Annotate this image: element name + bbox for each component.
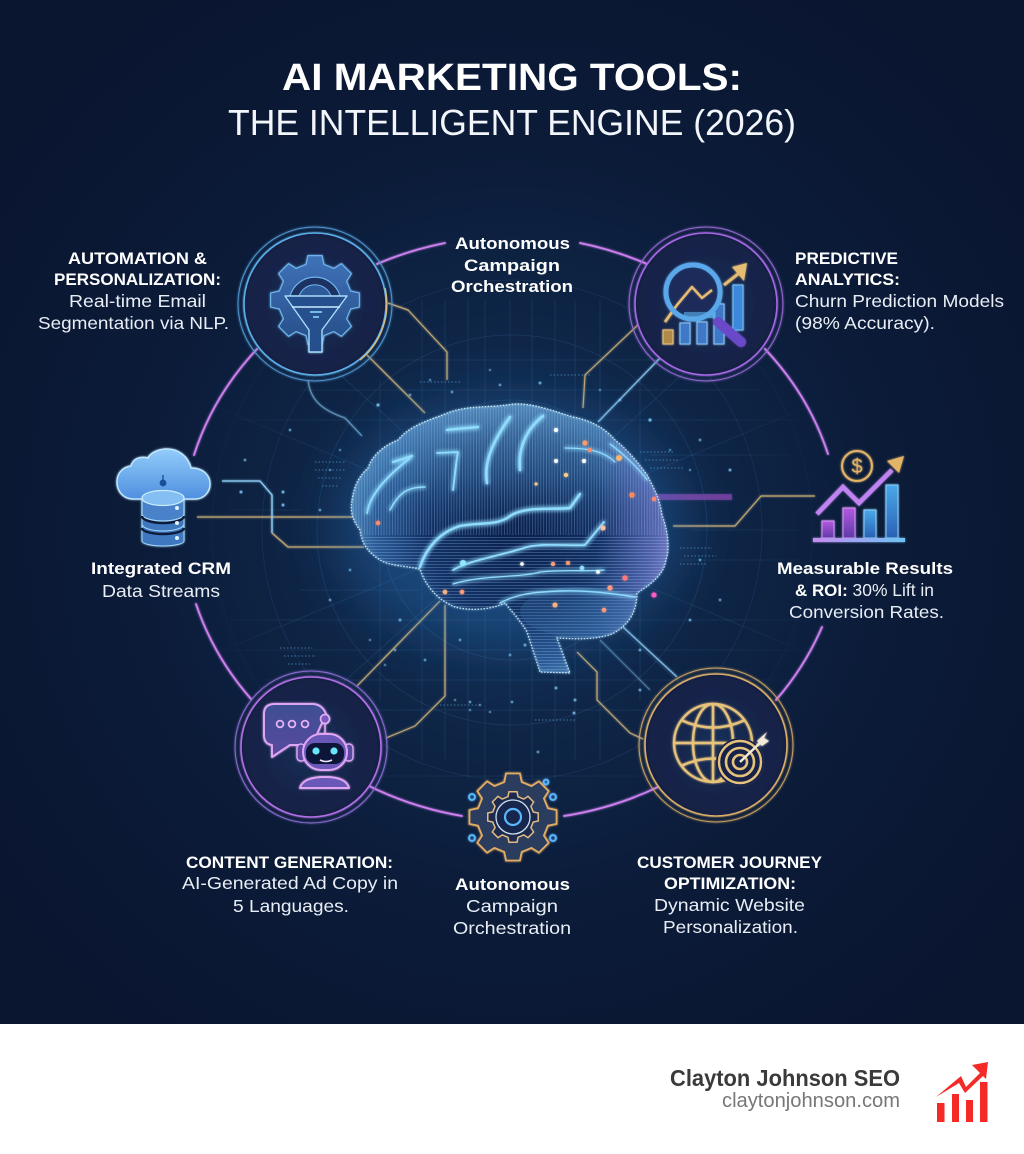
label text: Churn Prediction Models — [795, 291, 1004, 311]
node: content generation — [182, 671, 398, 916]
label text: Real-time Email — [69, 291, 206, 311]
label text: CONTENT GENERATION: — [186, 853, 393, 872]
data dots — [240, 369, 731, 753]
node: customer journey optimization — [637, 668, 823, 937]
icon: rising chart with coin — [813, 451, 905, 542]
label text: Integrated CRM — [91, 559, 231, 578]
label text: AUTOMATION & — [68, 249, 207, 268]
label text: PREDICTIVE — [795, 249, 898, 268]
icon: cloud database — [117, 449, 210, 546]
label text — [453, 875, 571, 938]
title — [228, 57, 796, 143]
label text — [777, 559, 953, 622]
node ring — [629, 227, 783, 381]
node: predictive analytics — [629, 227, 1004, 381]
title line 2: THE INTELLIGENT ENGINE (2026) — [228, 102, 796, 143]
label text: OPTIMIZATION: — [664, 874, 796, 893]
title line 1: AI MARKETING TOOLS: — [282, 57, 742, 99]
icon: gear — [469, 774, 556, 860]
label text — [182, 853, 398, 916]
node ring — [639, 668, 793, 822]
label: autonomous campaign orchestration top — [451, 234, 573, 296]
label text: Segmentation via NLP. — [38, 313, 229, 333]
brand url: claytonjohnson.com — [722, 1090, 900, 1112]
icon: red growth chart — [936, 1062, 988, 1122]
label text: PERSONALIZATION: — [54, 270, 221, 289]
brain textures — [345, 400, 675, 685]
gold traces — [197, 303, 815, 739]
brain folds — [367, 416, 647, 603]
brain halo — [335, 400, 685, 650]
node: autonomous campaign orchestration bottom — [453, 774, 571, 938]
blue traces — [222, 358, 677, 690]
label text: Orchestration — [453, 918, 571, 938]
brain edge — [351, 404, 668, 673]
label text: Data Streams — [102, 581, 220, 601]
label text: Conversion Rates. — [789, 602, 944, 622]
brain sparks — [376, 428, 656, 612]
icon: gear with funnel — [271, 256, 359, 352]
brand name: Clayton Johnson SEO — [670, 1065, 900, 1091]
ring arcs — [194, 243, 828, 816]
label text: Measurable Results — [777, 559, 953, 578]
label text: ANALYTICS: — [795, 270, 900, 289]
icon: magnifier and chart — [663, 263, 747, 344]
label text — [91, 559, 231, 601]
tech grid background — [230, 240, 800, 817]
node: measurable results — [777, 451, 953, 622]
central AI brain — [335, 400, 685, 685]
footer band — [0, 1024, 1024, 1154]
node: automation and personalization — [38, 227, 392, 381]
icon: globe and target — [674, 704, 769, 786]
label text: Personalization. — [663, 917, 798, 937]
label: autonomous campaign orchestration top: Autonomous — [455, 234, 570, 253]
label text — [795, 249, 1004, 333]
icon: chat bubble and robot — [264, 704, 353, 788]
label text — [38, 249, 229, 333]
label text: & ROI: 30% Lift in — [795, 580, 934, 600]
label: autonomous campaign orchestration top: Orchestration — [451, 277, 573, 296]
footer brand — [670, 1062, 988, 1122]
label: autonomous campaign orchestration top: Campaign — [464, 256, 560, 275]
label text: Autonomous — [455, 875, 570, 894]
node ring — [235, 671, 387, 823]
label text — [637, 853, 823, 937]
node: integrated crm — [91, 449, 231, 601]
dashed data clusters — [280, 375, 716, 720]
label text: 5 Languages. — [233, 896, 349, 916]
node ring — [238, 227, 392, 381]
label text: AI-Generated Ad Copy in — [182, 873, 398, 893]
magenta data band — [656, 494, 732, 500]
label text: Dynamic Website — [654, 895, 805, 915]
brain body — [351, 404, 668, 673]
label text: CUSTOMER JOURNEY — [637, 853, 823, 872]
circuit traces — [197, 303, 815, 739]
label text: (98% Accuracy). — [795, 313, 935, 333]
icon: rising chart with coin: $ — [851, 456, 863, 478]
label text: Campaign — [466, 896, 558, 916]
